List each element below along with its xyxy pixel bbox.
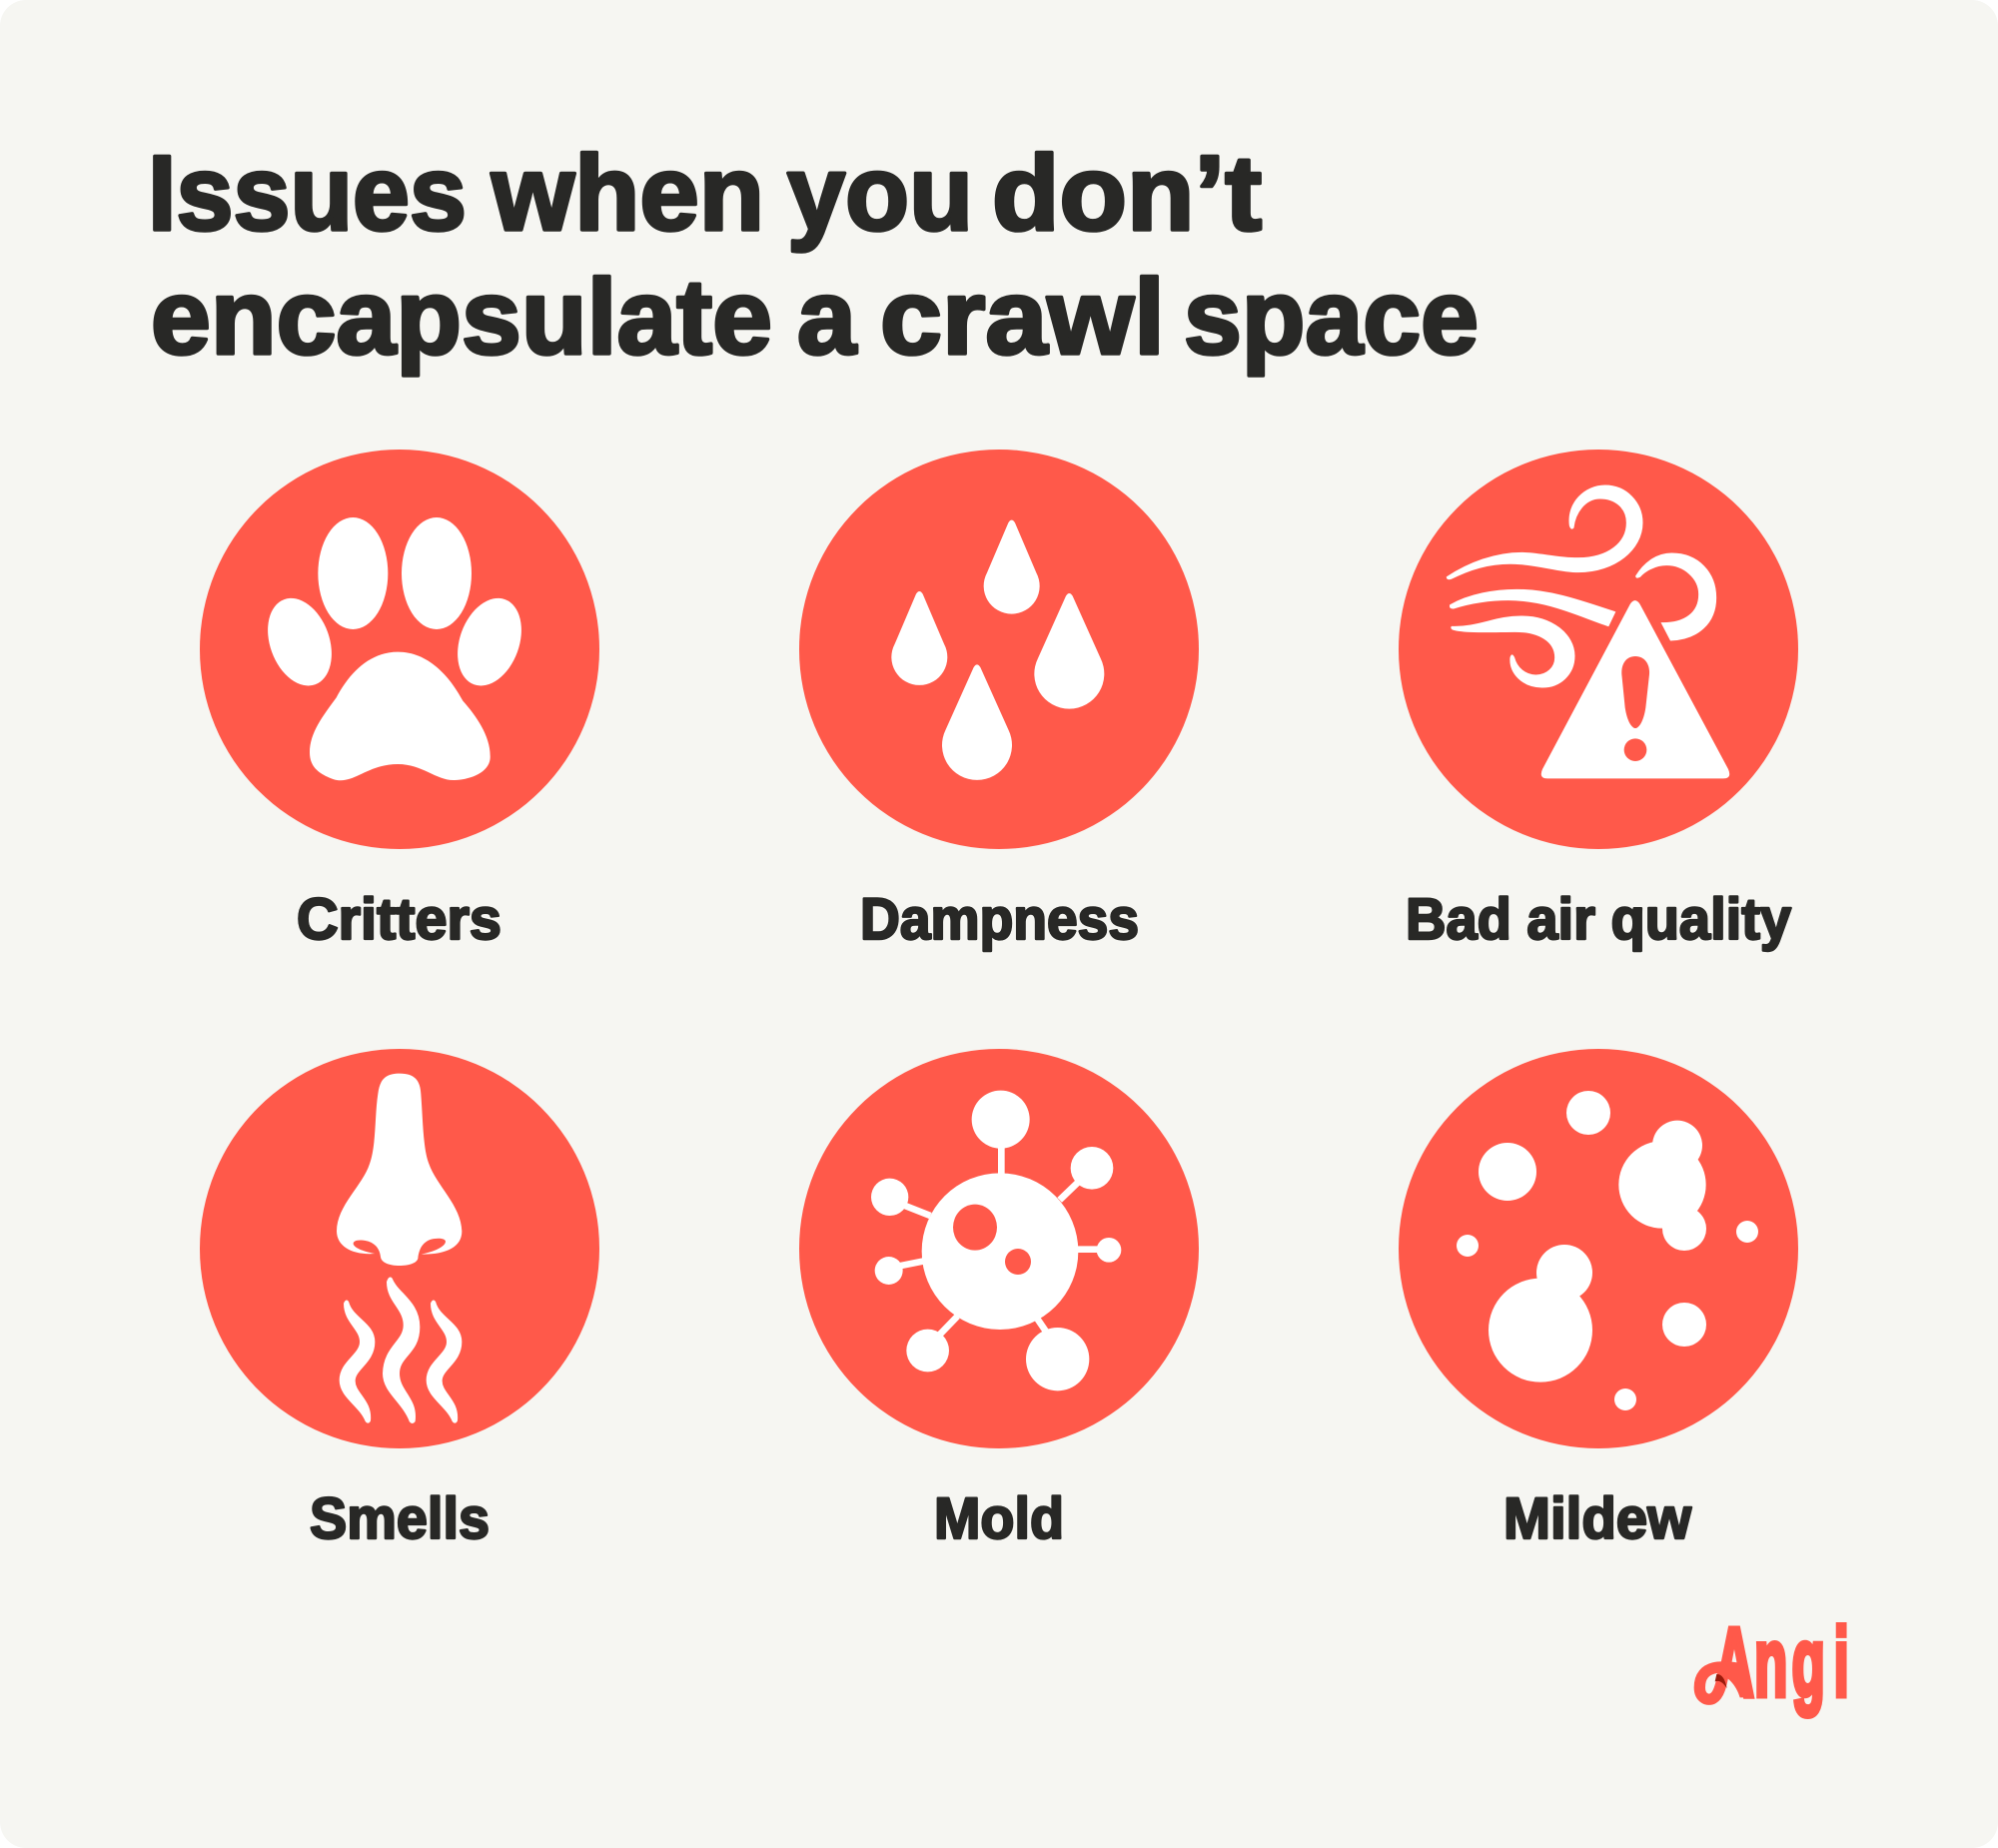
panel: critters xyxy=(200,450,599,952)
logo: Angi: Angi xyxy=(1714,1608,1849,1716)
panel: smells xyxy=(200,1049,599,1551)
title: crawl xyxy=(880,257,1165,377)
panel: mildew xyxy=(1399,1049,1798,1551)
icon: wind and warning triangle xyxy=(1447,485,1729,778)
icon: mildew spots xyxy=(1457,1091,1758,1410)
label: Mildew: Mildew xyxy=(1503,1486,1692,1551)
label: Dampness: Dampness xyxy=(860,887,1139,952)
title: when xyxy=(491,133,764,253)
label: Smells: Smells xyxy=(310,1486,490,1551)
icon: paw print xyxy=(257,517,532,780)
icon: nose and odor waves xyxy=(337,1074,462,1422)
label: Critters: Critters xyxy=(297,887,501,952)
title xyxy=(148,133,1479,377)
title: a xyxy=(797,257,857,377)
panel: mold xyxy=(799,1049,1199,1551)
icon: mold spore xyxy=(871,1091,1121,1390)
title: Issues xyxy=(148,133,467,253)
title: don’t xyxy=(992,133,1262,253)
icon: water drops xyxy=(891,520,1104,780)
panel: dampness xyxy=(799,450,1199,952)
panel: bad air quality xyxy=(1399,450,1798,952)
title: space xyxy=(1184,257,1479,377)
label: Mold: Mold xyxy=(934,1486,1064,1551)
title: encapsulate xyxy=(151,257,772,377)
title: you xyxy=(787,133,973,253)
label: Bad air quality: Bad air quality xyxy=(1406,887,1791,952)
